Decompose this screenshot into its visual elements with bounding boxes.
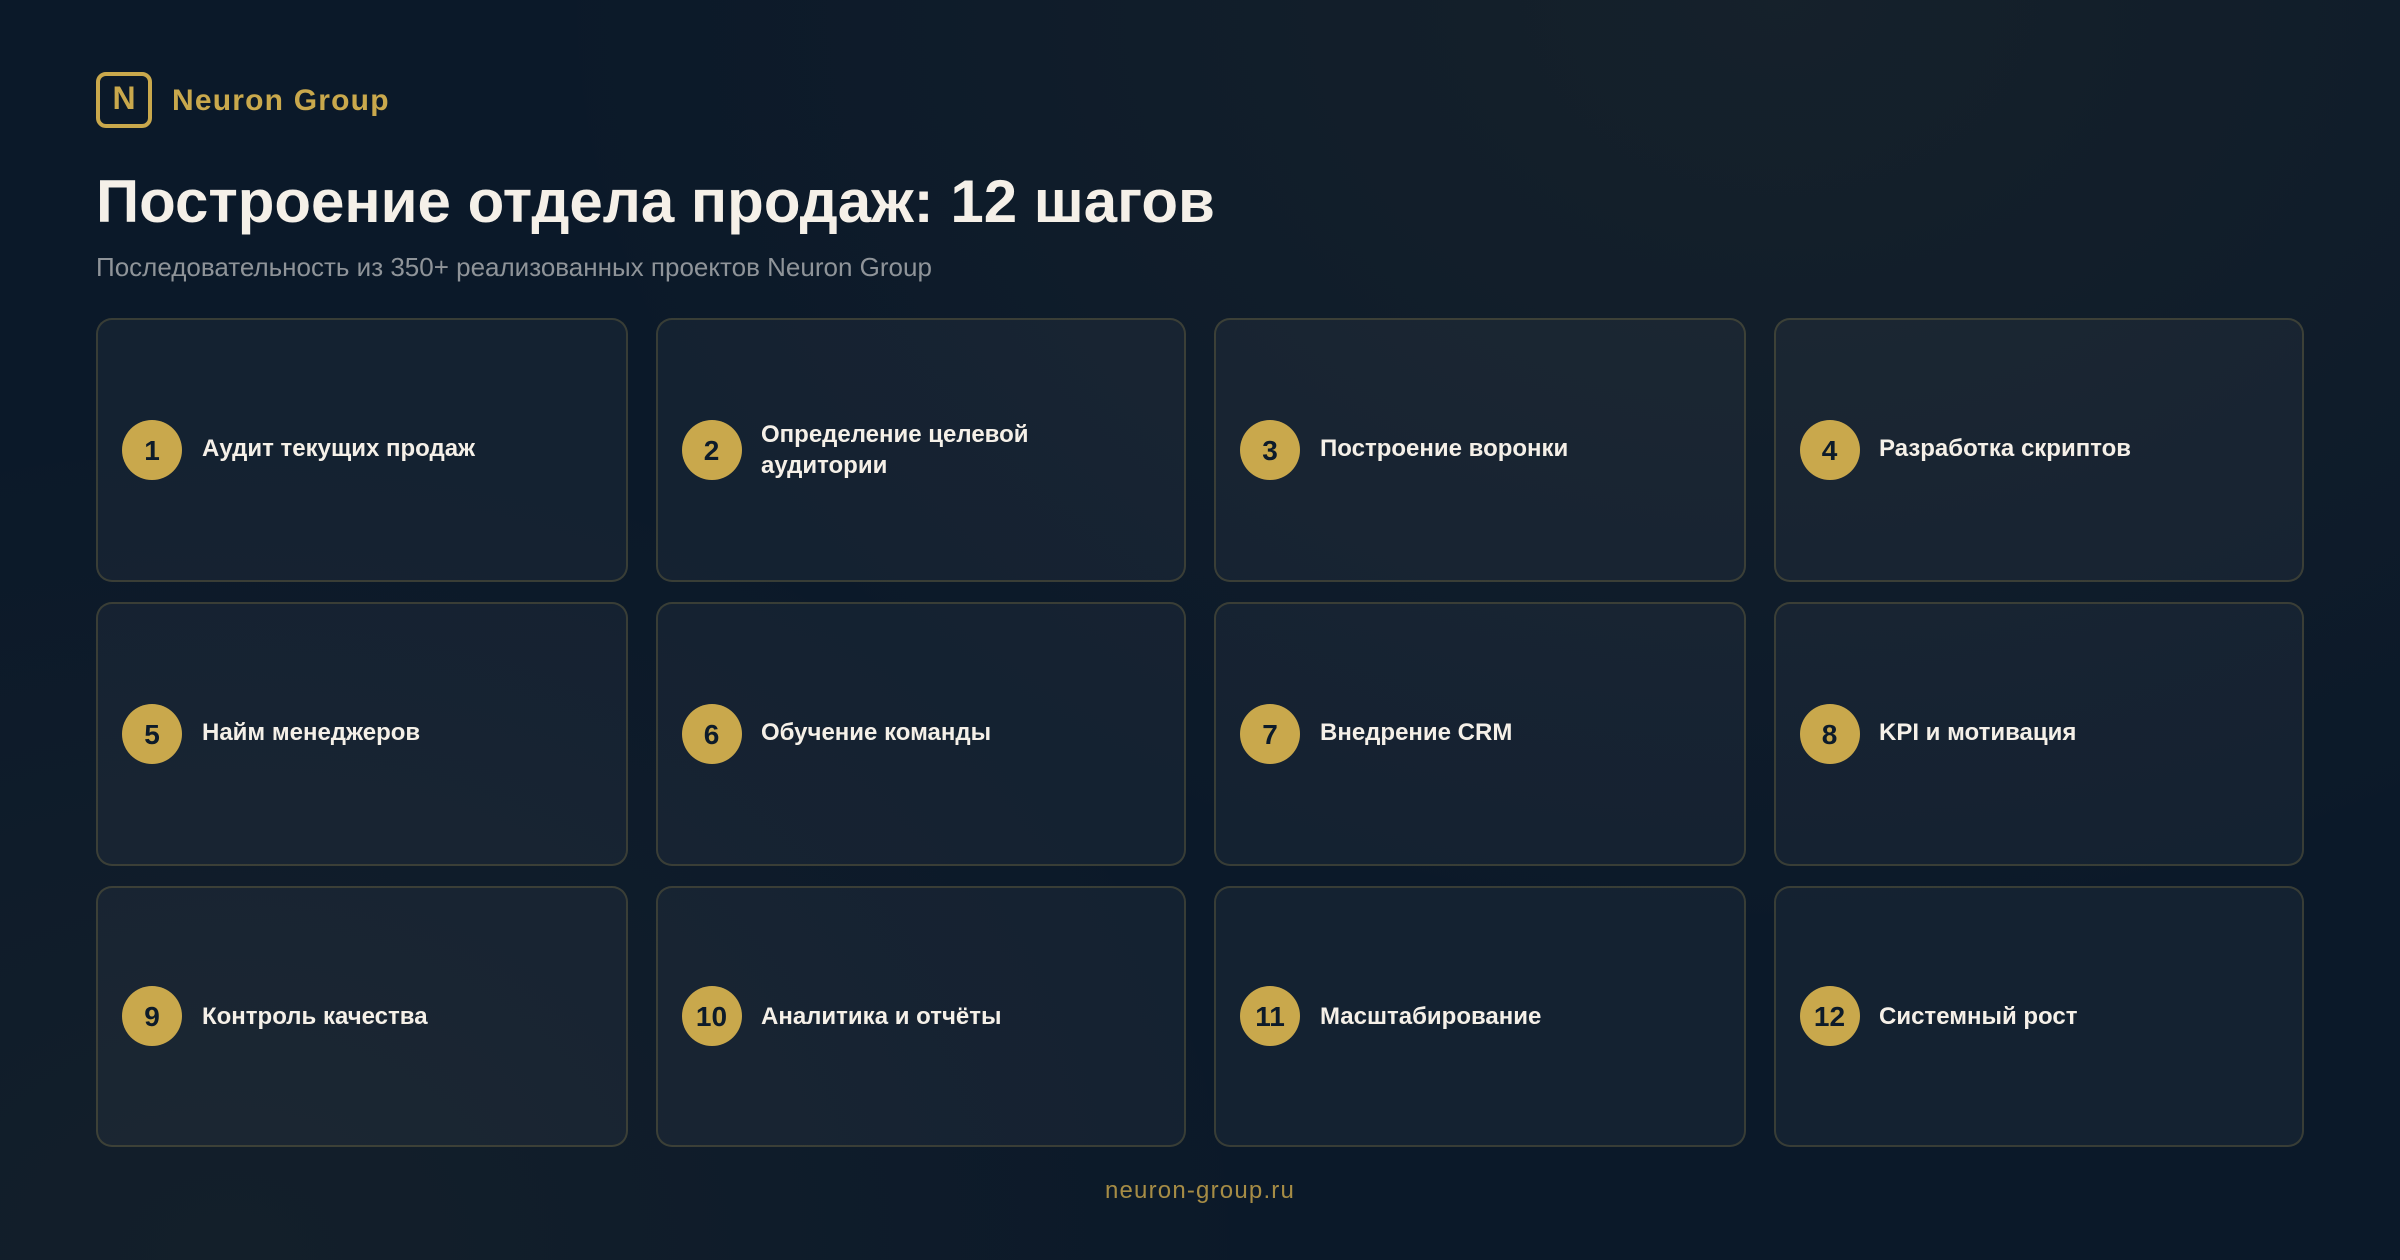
card: step 5: 5 <box>144 719 160 750</box>
card: step 12: Системный рост <box>1879 1003 2078 1030</box>
card: step 1: Аудит текущих продаж <box>202 434 475 462</box>
title: Построение отдела продаж: 12 шагов <box>96 168 1215 235</box>
card: step 5: Найм менеджеров <box>202 718 420 746</box>
card: step 12 <box>1774 886 2304 1147</box>
card: step 8 <box>1774 602 2304 866</box>
card: step 3: Построение воронки <box>1320 434 1568 462</box>
logo icon: N <box>112 80 136 116</box>
card: step 7 <box>1214 602 1746 866</box>
card: step 2 <box>656 318 1186 582</box>
card: step 2: 2 <box>704 435 719 466</box>
card: step 8: 8 <box>1822 719 1837 750</box>
card: step 10: 10 <box>696 1000 727 1032</box>
card: step 7: 7 <box>1262 719 1278 750</box>
card: step 10: Аналитика и отчёты <box>761 1003 1001 1030</box>
card: step 9: Контроль качества <box>202 1003 428 1030</box>
card: step 6 <box>656 602 1186 866</box>
card: step 3 <box>1214 318 1746 582</box>
card: step 7: Внедрение CRM <box>1320 718 1512 746</box>
card: step 4: Разработка скриптов <box>1879 434 2131 462</box>
logo icon <box>96 72 152 128</box>
card: step 4 <box>1774 318 2304 582</box>
card: step 9 <box>96 886 628 1147</box>
card: step 4: 4 <box>1822 435 1837 466</box>
card: step 6: 6 <box>704 719 719 750</box>
footer url: neuron-group.ru <box>1105 1177 1295 1204</box>
card: step 8: KPI и мотивация <box>1879 718 2076 746</box>
card: step 3: 3 <box>1262 435 1278 466</box>
card: step 6: Обучение команды <box>761 718 991 746</box>
card: step 9: 9 <box>144 1000 160 1032</box>
card: step 5 <box>96 602 628 866</box>
brand name: Neuron Group <box>172 84 390 117</box>
card: step 2: Определение целевой <box>761 421 1029 448</box>
card: step 11 <box>1214 886 1746 1147</box>
card: step 1 <box>96 318 628 582</box>
card: step 11: 11 <box>1255 1000 1285 1032</box>
subtitle: Последовательность из 350+ реализованных проектов Neuron Group <box>96 252 932 282</box>
card: step 1: 1 <box>144 435 160 466</box>
card: step 11: Масштабирование <box>1320 1003 1541 1030</box>
card: step 10 <box>656 886 1186 1147</box>
card: step 12: 12 <box>1814 1000 1845 1032</box>
card: step 2: аудитории <box>761 452 887 479</box>
